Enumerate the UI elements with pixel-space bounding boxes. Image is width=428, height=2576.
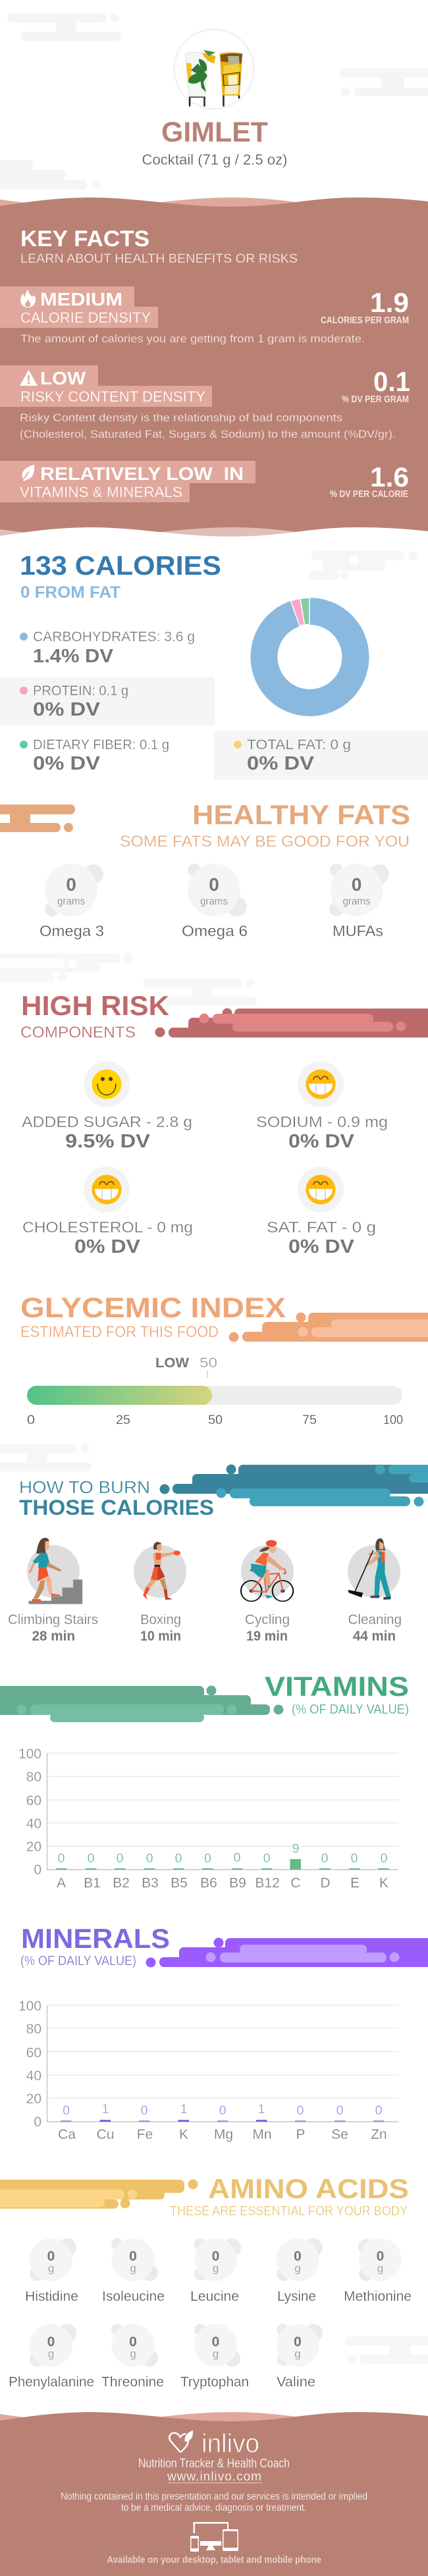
subtitle: Cocktail (71 g / 2.5 oz) <box>142 151 287 168</box>
legend: carbohydrates: 1.4% DV <box>33 646 114 667</box>
bar chart: minerals: Ca <box>58 2127 76 2142</box>
panel: vitamins <box>0 1671 409 1891</box>
item: sodium <box>256 1061 388 1152</box>
activity: boxing: 10 min <box>140 1629 181 1644</box>
activity: cycling: Cycling <box>245 1612 290 1627</box>
activity: cleaning: Cleaning <box>348 1612 402 1627</box>
item: cholesterol: 0% DV <box>74 1236 141 1257</box>
amino: valine: Valine <box>277 2375 315 2390</box>
bar chart: minerals: 0 <box>336 2103 344 2118</box>
bar chart: vitamins: 0 <box>175 1851 182 1866</box>
bar chart: minerals: Mn <box>252 2127 272 2142</box>
bar chart: minerals: Zn <box>371 2127 387 2142</box>
item: mufas: MUFAs <box>333 922 383 939</box>
bar chart: minerals: 0 <box>375 2103 383 2118</box>
panel: amino acids <box>0 2173 412 2390</box>
header ribbon <box>159 1464 428 1506</box>
legend: dietary fiber: 0% DV <box>33 753 101 774</box>
value: 1.6: 1.6 <box>370 461 409 492</box>
unit: dv per gram: % DV PER GRAM <box>342 394 409 405</box>
gauge chart: 75 <box>302 1413 317 1427</box>
amino: histidine: g <box>48 2262 54 2274</box>
bar chart: vitamins: 0 <box>88 1851 95 1866</box>
item: saturated fat: 0% DV <box>288 1236 355 1257</box>
item: added sugar: 9.5% DV <box>65 1131 151 1152</box>
panel: header <box>142 29 287 168</box>
amino: threonine <box>101 2324 164 2390</box>
panel: how to burn <box>8 1464 428 1644</box>
header ribbon <box>0 804 75 832</box>
legend: total fat: TOTAL FAT: 0 g <box>247 737 351 752</box>
bar chart: vitamins: B1 <box>84 1876 101 1891</box>
bar chart: vitamins: 0 <box>381 1851 388 1866</box>
subheading: SOME FATS MAY BE GOOD FOR YOU <box>120 833 410 851</box>
bar chart: vitamins: E <box>350 1876 360 1891</box>
item: mufas: grams <box>342 896 370 907</box>
amino: lysine <box>277 2238 323 2304</box>
bar chart: minerals: 60 <box>26 2045 41 2061</box>
bar chart: minerals: 1 <box>258 2102 265 2116</box>
activity: climbing stairs: 28 min <box>32 1629 75 1644</box>
legend: total fat: 0% DV <box>247 753 315 774</box>
amino: lysine: g <box>294 2262 301 2274</box>
gauge chart <box>27 1355 403 1427</box>
gauge chart: 100 <box>383 1413 403 1427</box>
bar chart: minerals: Se <box>331 2127 348 2142</box>
bar chart: minerals: P <box>296 2127 306 2142</box>
label: relatively low in: RELATIVELY LOW IN <box>40 463 244 484</box>
panel: high risk <box>20 990 428 1257</box>
legend: protein <box>0 677 215 725</box>
amino: histidine <box>25 2238 78 2304</box>
bar chart: vitamins: 20 <box>26 1839 41 1854</box>
fact: vitamins and minerals <box>0 461 409 502</box>
header ribbon <box>0 2179 198 2209</box>
bar chart: vitamins: 0 <box>234 1851 241 1865</box>
amino: lysine: Lysine <box>277 2289 316 2304</box>
item: sodium: SODIUM - 0.9 mg <box>256 1113 388 1130</box>
heading: minerals: MINERALS <box>21 1923 170 1954</box>
bar chart: minerals: 40 <box>26 2068 41 2084</box>
heading line 1: HOW TO BURN <box>19 1477 150 1497</box>
value: 1.9: 1.9 <box>370 287 409 318</box>
bar chart: vitamins: 100 <box>18 1747 41 1762</box>
amino: methionine: Methionine <box>344 2289 412 2304</box>
header ribbon <box>0 1685 283 1722</box>
bar chart: vitamins: 0 <box>351 1851 358 1866</box>
subheading: (% OF DAILY VALUE) <box>20 1954 136 1968</box>
legend: total fat <box>214 731 428 779</box>
heading: vitamins: VITAMINS <box>265 1671 409 1702</box>
activity: climbing stairs: Climbing Stairs <box>8 1612 98 1627</box>
gauge chart: 50 <box>208 1413 223 1427</box>
item: omega 3: Omega 3 <box>40 922 104 939</box>
disclaimer: Nothing contained in this presentation and our services is intended or implied <box>61 2491 367 2502</box>
amino: lysine: 0 <box>294 2249 302 2264</box>
icon: warning triangle <box>20 370 38 386</box>
tagline: Nutrition Tracker & Health Coach <box>138 2457 290 2471</box>
bar chart: vitamins: 0 <box>117 1851 124 1866</box>
amino: threonine: Threonine <box>101 2375 164 2390</box>
amino: leucine: Leucine <box>190 2289 239 2304</box>
bar chart: minerals: K <box>179 2127 188 2142</box>
activity: cycling <box>241 1540 294 1644</box>
item: sodium: 0% DV <box>288 1131 355 1152</box>
subheading: ESTIMATED FOR THIS FOOD <box>20 1323 219 1341</box>
amino: tryptophan <box>180 2324 249 2390</box>
amino: tryptophan: 0 <box>212 2334 219 2350</box>
legend: carbohydrates: CARBOHYDRATES: 3.6 g <box>33 629 195 644</box>
bar chart: minerals: 20 <box>26 2091 41 2107</box>
amino: phenylalanine: g <box>48 2348 54 2360</box>
bar chart: minerals: 0 <box>219 2103 227 2118</box>
logo: inlivo: inlivo <box>201 2429 259 2458</box>
amino: tryptophan: g <box>213 2348 219 2360</box>
header ribbon <box>229 1313 428 1342</box>
item: omega 6: grams <box>200 896 228 907</box>
item: omega 3 <box>40 864 104 939</box>
label: risky content density: RISKY CONTENT DENSITY <box>20 388 205 405</box>
amino: isoleucine <box>102 2238 165 2304</box>
item: mufas: 0 <box>352 874 361 895</box>
logo: inlivo <box>169 2429 259 2458</box>
bar chart: vitamins: 40 <box>26 1816 41 1831</box>
label: calorie density: CALORIE DENSITY <box>20 309 151 326</box>
bar chart: vitamins: K <box>379 1876 388 1891</box>
bar chart: minerals: 1 <box>102 2102 109 2116</box>
bar chart: vitamins: 0 <box>146 1851 153 1866</box>
subheading: (% OF DAILY VALUE) <box>292 1702 409 1717</box>
subheading: THESE ARE ESSENTIAL FOR YOUR BODY <box>170 2204 408 2219</box>
unit: calories per gram: CALORIES PER GRAM <box>321 315 409 326</box>
description: (Cholesterol, Saturated Fat, Sugars & Sodium) to the amount (%DV/gr). <box>20 429 396 440</box>
icon: leaf <box>22 465 34 481</box>
bar chart: minerals: 100 <box>18 1999 41 2014</box>
amino: methionine <box>344 2238 412 2304</box>
bar chart: vitamins: A <box>57 1876 66 1891</box>
donut chart <box>264 598 356 703</box>
bar chart: vitamins: B2 <box>113 1876 130 1891</box>
heading line 2: THOSE CALORIES <box>19 1496 214 1519</box>
description: The amount of calories you are getting from 1 gram is moderate. <box>20 333 365 345</box>
item: omega 6: Omega 6 <box>182 922 248 939</box>
heading: glycemic index: GLYCEMIC INDEX <box>20 1292 286 1324</box>
amino: phenylalanine: Phenylalanine <box>9 2375 94 2390</box>
bar chart: vitamins: 0 <box>58 1851 65 1866</box>
gauge chart: 50 <box>200 1355 217 1371</box>
amino: leucine <box>190 2238 241 2304</box>
amino: histidine: Histidine <box>25 2289 78 2304</box>
amino: histidine: 0 <box>47 2249 55 2264</box>
bar chart: vitamins: D <box>320 1876 331 1891</box>
fact: calorie density <box>0 286 409 345</box>
legend: carbohydrates <box>20 629 195 667</box>
item: added sugar <box>22 1061 192 1152</box>
gauge chart: LOW <box>155 1355 189 1371</box>
bar chart: vitamins: 60 <box>26 1793 41 1808</box>
unit: dv per calorie: % DV PER CALORIE <box>330 489 408 500</box>
activity: boxing: Boxing <box>140 1612 181 1627</box>
bar chart: minerals <box>18 1999 398 2142</box>
activity: cleaning: 44 min <box>353 1629 396 1644</box>
heading: high risk: HIGH RISK <box>21 990 169 1021</box>
item: omega 3: grams <box>57 896 85 907</box>
subheading: key facts: LEARN ABOUT HEALTH BENEFITS OR RISKS <box>20 251 298 266</box>
amino: phenylalanine <box>9 2324 94 2390</box>
subheading: components: COMPONENTS <box>20 1024 136 1041</box>
panel: minerals <box>18 1923 428 2142</box>
amino: threonine: 0 <box>129 2334 137 2350</box>
legend: protein: 0% DV <box>33 699 101 720</box>
amino: leucine: 0 <box>212 2249 219 2264</box>
label: low: LOW <box>40 368 86 388</box>
subheading: from fat: 0 FROM FAT <box>20 583 120 602</box>
bar chart: minerals: Cu <box>97 2127 114 2142</box>
bar chart: vitamins: B3 <box>142 1876 159 1891</box>
panel: healthy fats <box>0 799 410 939</box>
amino: threonine: g <box>130 2348 136 2360</box>
gauge chart: 0 <box>27 1413 35 1427</box>
bar chart: vitamins: B12 <box>255 1876 280 1891</box>
bar chart: vitamins: 0 <box>34 1862 41 1878</box>
bar chart: vitamins <box>18 1747 398 1891</box>
legend: dietary fiber <box>20 737 169 774</box>
amino: methionine: g <box>377 2262 383 2274</box>
bar chart: minerals: 0 <box>297 2103 304 2118</box>
header ribbon <box>146 1938 428 1967</box>
amino: leucine: g <box>213 2262 219 2274</box>
amino: valine: 0 <box>294 2334 302 2350</box>
bar chart: minerals: 0 <box>63 2103 70 2118</box>
gauge chart: 25 <box>116 1413 130 1427</box>
heading: amino acids: AMINO ACIDS <box>208 2173 409 2204</box>
activity: climbing stairs <box>8 1538 98 1644</box>
panel: calories <box>0 550 428 779</box>
bar chart: vitamins: B9 <box>229 1876 246 1891</box>
legend: protein: PROTEIN: 0.1 g <box>33 683 128 698</box>
icon: drink photo circle <box>174 29 254 109</box>
bar chart: vitamins: C <box>290 1876 301 1891</box>
amino: tryptophan: Tryptophan <box>180 2375 249 2390</box>
title: GIMLET <box>161 117 268 148</box>
panel: footer <box>0 2412 428 2576</box>
bar chart: vitamins: 0 <box>321 1851 329 1866</box>
description: Risky Content density is the relationship of bad components <box>20 412 342 424</box>
activity: cycling: 19 min <box>246 1629 288 1644</box>
bar chart: minerals: 80 <box>26 2022 41 2037</box>
icon: devices <box>190 2522 238 2552</box>
heading: calories: 133 CALORIES <box>20 550 221 581</box>
icon: flame <box>20 290 36 307</box>
bar chart: minerals: 0 <box>141 2103 148 2118</box>
item: saturated fat <box>267 1167 376 1257</box>
label: vitamins and minerals: VITAMINS & MINERALS <box>20 484 182 500</box>
heading: key facts: KEY FACTS <box>20 226 149 251</box>
item: omega 6 <box>182 864 248 939</box>
bar chart: vitamins: 9 <box>292 1841 299 1856</box>
fact: risky content density <box>0 365 410 440</box>
item: mufas <box>329 864 389 939</box>
bar chart: vitamins: 0 <box>204 1851 211 1866</box>
item: saturated fat: SAT. FAT - 0 g <box>267 1219 376 1236</box>
bar chart: vitamins: 80 <box>26 1770 41 1785</box>
label: medium: MEDIUM <box>40 289 122 309</box>
header ribbon <box>155 1009 428 1038</box>
activity: cleaning <box>348 1538 402 1644</box>
item: cholesterol: CHOLESTEROL - 0 mg <box>22 1219 193 1236</box>
legend: dietary fiber: DIETARY FIBER: 0.1 g <box>33 737 169 752</box>
amino: isoleucine: 0 <box>129 2249 137 2264</box>
heading: healthy fats: HEALTHY FATS <box>192 799 410 830</box>
item: added sugar: ADDED SUGAR - 2.8 g <box>22 1113 192 1130</box>
availability note: Available on your desktop, tablet and mobile phone <box>107 2554 321 2565</box>
amino: valine: g <box>294 2348 301 2360</box>
amino: isoleucine: Isoleucine <box>102 2289 165 2304</box>
value: 0.1: 0.1 <box>373 366 410 397</box>
item: omega 6: 0 <box>209 874 219 895</box>
panel: key facts <box>0 197 428 540</box>
amino: isoleucine: g <box>130 2262 136 2274</box>
item: omega 3: 0 <box>66 874 76 895</box>
amino: phenylalanine: 0 <box>47 2334 55 2350</box>
bar chart: minerals: Fe <box>137 2127 153 2142</box>
disclaimer: to be a medical advice, diagnosis or treatment. <box>121 2502 307 2513</box>
bar chart: minerals: 0 <box>34 2115 41 2130</box>
bar chart: vitamins: B5 <box>171 1876 188 1891</box>
amino: methionine: 0 <box>377 2249 384 2264</box>
bar chart: vitamins: B6 <box>200 1876 217 1891</box>
bar chart: minerals: 1 <box>180 2102 187 2116</box>
bar chart: vitamins: 0 <box>263 1851 271 1866</box>
item: cholesterol <box>22 1167 193 1257</box>
website link: www.inlivo.com <box>167 2470 261 2484</box>
panel: glycemic index <box>20 1292 428 1427</box>
amino: valine <box>277 2324 323 2390</box>
bar chart: minerals: Mg <box>214 2127 233 2142</box>
activity: boxing <box>134 1542 186 1644</box>
